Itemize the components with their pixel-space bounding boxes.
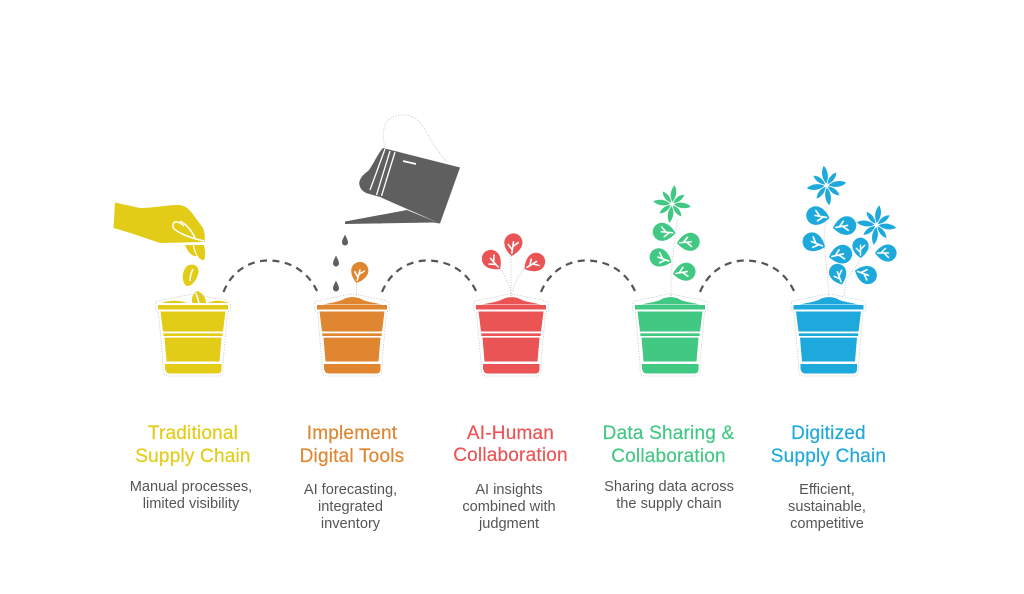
text: stage 2 description: integrated <box>318 499 383 515</box>
heading: traditional supply chain: Supply Chain <box>135 446 251 467</box>
icon: three-leaf plant <box>478 232 549 296</box>
pot: blue <box>791 294 866 376</box>
stage 1: traditional supply chain <box>114 202 230 376</box>
icon: full plant with two flowers <box>800 163 899 296</box>
text: stage 2 description: AI forecasting, <box>304 482 397 498</box>
icon: flowering plant <box>647 183 701 296</box>
text: stage 3 description: AI insights <box>475 482 543 498</box>
soil: orange <box>323 297 382 304</box>
pot: red <box>474 294 548 376</box>
heading: implement digital tools: Digital Tools <box>300 446 404 467</box>
arrow: dashed arc 3 <box>541 260 635 292</box>
text: stage 4 description: Sharing data across <box>604 479 734 495</box>
pot: yellow <box>156 294 230 376</box>
soil: red <box>482 297 541 304</box>
arrow: dashed arc 2 <box>382 260 476 292</box>
heading: digitized supply chain: Digitized <box>791 423 866 444</box>
text: stage 3 description: combined with <box>462 499 556 515</box>
text: stage 1 description: limited visibility <box>143 496 240 512</box>
heading: AI-human collaboration: AI-Human <box>467 423 554 444</box>
text: stage 2 description: inventory <box>321 516 381 532</box>
icon: seed in soil <box>192 291 206 303</box>
text: stage 4 description: the supply chain <box>616 496 722 512</box>
heading: digitized supply chain: Supply Chain <box>771 446 886 467</box>
heading: data sharing and collaboration: Data Sharing & <box>603 423 734 444</box>
stage 3: AI-human collaboration <box>474 232 549 376</box>
arrow: dashed arc 4 <box>700 260 794 292</box>
icon: hand dropping seeds <box>114 202 228 303</box>
text: stage 5 description: Efficient, <box>799 482 855 498</box>
text: stage 1 description: Manual processes, <box>130 479 252 495</box>
pot: orange <box>314 294 390 376</box>
stage 2: implement digital tools <box>314 115 460 376</box>
icon: falling seed <box>183 265 199 286</box>
icon: sprout <box>348 260 370 296</box>
text: stage 5 description: competitive <box>790 516 864 532</box>
soil: green <box>641 297 700 304</box>
stage 5: digitized supply chain <box>791 163 899 376</box>
soil: blue <box>800 297 858 304</box>
arrow: dashed arc 1 <box>224 260 317 292</box>
text: stage 3 description: judgment <box>478 516 539 532</box>
text: stage 5 description: sustainable, <box>788 499 866 515</box>
heading: data sharing and collaboration: Collaboration <box>611 446 726 467</box>
heading: implement digital tools: Implement <box>307 423 398 444</box>
heading: AI-human collaboration: Collaboration <box>453 445 568 466</box>
heading: traditional supply chain: Traditional <box>148 423 238 444</box>
icon: watering can <box>345 115 460 224</box>
icon: water drops <box>333 234 348 292</box>
stage 4: data sharing and collaboration <box>632 183 708 376</box>
pot: green <box>632 294 708 376</box>
